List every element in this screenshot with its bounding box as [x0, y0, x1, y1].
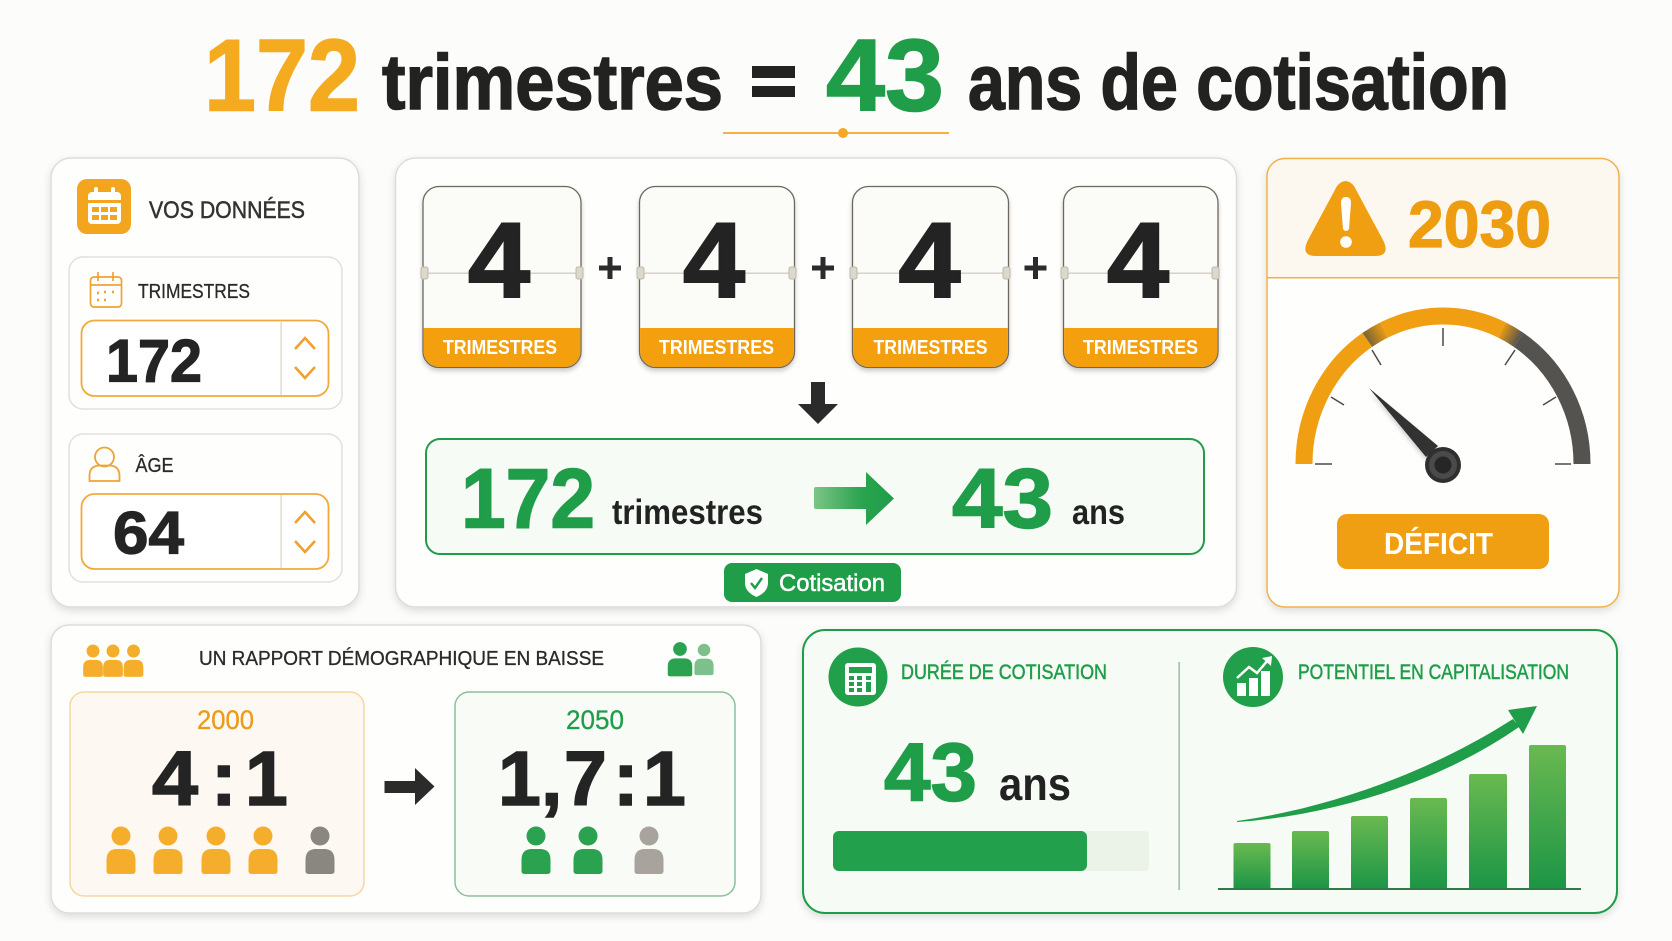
pictogram: actifs 2050: [522, 826, 664, 874]
card: trimestres: [69, 257, 342, 409]
panel: 2030 deficit: [1267, 158, 1619, 607]
arrow: growth curve: [1237, 706, 1537, 822]
card: 2050: [455, 692, 735, 896]
title: trimestres: [382, 38, 723, 126]
flip card 3: [850, 186, 1010, 368]
heading: vos données: VOS DONNÉES: [149, 197, 305, 224]
header band: [1268, 160, 1618, 277]
card: 2050: 1: [498, 736, 541, 822]
card: 2000: [70, 692, 364, 896]
card: 2000: 4: [152, 736, 198, 822]
plus 3: [1024, 257, 1046, 279]
flip card 1: TRIMESTRES: [443, 336, 557, 359]
badge: déficit: DÉFICIT: [1384, 526, 1493, 561]
card: 2000: 2000: [197, 705, 254, 735]
card: 2050: ,: [541, 736, 562, 822]
value: 43 ans: [884, 726, 1071, 818]
icon: warning: [1305, 181, 1386, 256]
badge: cotisation: [724, 563, 901, 602]
label: âge: ÂGE: [136, 454, 174, 477]
icon: growth chart: [1223, 647, 1283, 707]
icon: shield: [745, 569, 768, 597]
title underline: [723, 128, 949, 138]
flip card 2: [637, 186, 796, 368]
arrow: conversion: [814, 472, 894, 525]
input: 172: [82, 320, 328, 396]
badge: cotisation: Cotisation: [779, 570, 885, 597]
value: 43 ans: ans: [999, 758, 1071, 810]
result box: [426, 439, 1204, 554]
card: âge: [69, 434, 342, 582]
bar chart: [1218, 745, 1581, 890]
panel: vos données: [51, 158, 359, 607]
year 2030: 2030: [1408, 187, 1551, 261]
icon: orange people: [83, 645, 143, 677]
result box: 172: [461, 452, 595, 546]
panel: rapport démographique: [51, 625, 761, 913]
result box: ans: [1072, 493, 1125, 532]
needle: [1369, 388, 1438, 457]
flip card 3: 4: [898, 200, 960, 320]
pictogram: actifs 2000: [106, 826, 334, 874]
value: 43 ans: 43: [884, 726, 977, 818]
badge: déficit: [1337, 514, 1549, 569]
plus 1: [599, 257, 621, 279]
flip card 3: TRIMESTRES: [874, 336, 988, 359]
label: trimestres: TRIMESTRES: [138, 280, 250, 303]
title: 172: [204, 18, 360, 132]
flip card 4: 4: [1107, 200, 1169, 320]
heading: potentiel: POTENTIEL EN CAPITALISATION: [1298, 660, 1569, 684]
flip card 2: TRIMESTRES: [659, 336, 774, 359]
plus 2: [812, 257, 834, 279]
icon: calendar outline: [90, 272, 122, 307]
arrow: right: [384, 768, 434, 805]
progress bar: [833, 831, 1149, 871]
card: 2050: 2050: [566, 705, 624, 735]
icon: green people: [668, 642, 714, 676]
icon: calendar badge: [77, 179, 131, 234]
panel: durée et capitalisation: [803, 630, 1617, 913]
flip card 2: 4: [683, 200, 745, 320]
heading: durée: DURÉE DE COTISATION: [901, 659, 1107, 684]
icon: person outline: [90, 448, 120, 481]
flip card 1: 4: [468, 200, 530, 320]
input: 64: 64: [113, 500, 185, 566]
icon: calculator: [828, 648, 888, 706]
card: 2050: 1: [643, 736, 686, 822]
input: 64: [82, 494, 328, 569]
heading: rapport: UN RAPPORT DÉMOGRAPHIQUE EN BAISSE: [199, 647, 604, 670]
result box: 43: [952, 452, 1053, 546]
card: 2050: :: [613, 736, 639, 822]
card: 2000: 1: [245, 736, 288, 822]
card: 2000: :: [211, 736, 237, 822]
title: [204, 18, 1509, 132]
title: 43: [826, 18, 944, 132]
input: 172: 172: [106, 328, 202, 394]
flip card 4: [1061, 186, 1219, 368]
arrow: down: [798, 382, 838, 424]
card: 2050: 7: [564, 736, 607, 822]
gauge: [1304, 316, 1582, 483]
flip card 4: TRIMESTRES: [1083, 336, 1198, 359]
flip card 1: [421, 186, 583, 368]
result box: trimestres: [612, 493, 763, 532]
panel: calcul: [396, 158, 1236, 607]
title: ans de cotisation: [968, 38, 1509, 126]
